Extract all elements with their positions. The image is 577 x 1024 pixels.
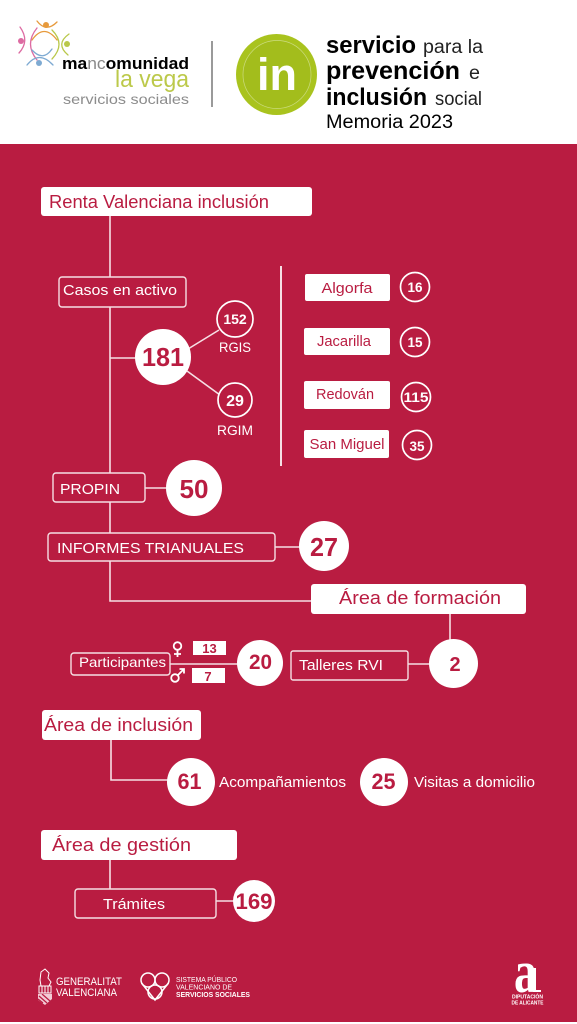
box: PROPIN: PROPIN — [60, 481, 120, 498]
value 61 Acompañamientos: Acompañamientos — [219, 775, 346, 791]
logo: in badge: in — [257, 49, 297, 100]
value 25 Visitas a domicilio: Visitas a domicilio — [414, 775, 535, 791]
value 20: 20 — [249, 651, 272, 674]
value 50: 50 — [180, 474, 208, 504]
box: Participantes — [71, 653, 170, 675]
value 61 Acompañamientos — [167, 758, 346, 806]
heading: Área de inclusión: Área de inclusión — [44, 715, 193, 735]
value 2: 2 — [449, 654, 461, 676]
heading: servicio para la prevención e inclusión social — [326, 32, 483, 133]
total 181 — [135, 329, 191, 385]
value 61 Acompañamientos: 61 — [178, 769, 202, 794]
box: Casos en activo: Casos en activo — [63, 282, 177, 299]
municipality: San Miguel: 35 — [409, 439, 425, 454]
municipality: Redován: Redován — [316, 386, 374, 403]
RGIS 152: 152 — [223, 311, 247, 327]
municipality: Jacarilla — [304, 328, 430, 356]
value 27: 27 — [310, 532, 338, 562]
value 25 Visitas a domicilio — [360, 758, 535, 806]
box: Talleres RVI: Talleres RVI — [299, 657, 383, 674]
box: Informes trianuales: INFORMES TRIANUALES — [57, 540, 244, 557]
connector lines — [110, 216, 450, 901]
box: Casos en activo — [59, 277, 186, 307]
municipalities divider — [280, 266, 282, 466]
RGIS 152 — [217, 301, 253, 355]
heading: Área de gestión — [41, 830, 237, 860]
icon: four figures — [18, 21, 70, 66]
municipality: Algorfa: 16 — [407, 280, 423, 295]
heading: servicio para la prevención e inclusión social: inclusión — [326, 84, 427, 111]
heading: servicio para la prevención e inclusión social: prevención — [326, 57, 460, 85]
value 50 — [166, 460, 222, 516]
municipality: Algorfa — [305, 272, 430, 302]
heading: servicio para la prevención e inclusión social: servicio — [326, 32, 416, 59]
logo: Diputación de Alicante: DIPUTACIÓN — [512, 992, 543, 1000]
box: Trámites — [75, 889, 216, 918]
logo: mancomunidad la vega — [18, 21, 190, 107]
box: PROPIN — [53, 473, 145, 502]
logo: Generalitat Valenciana: VALENCIANA — [56, 987, 118, 999]
municipality: Algorfa: Algorfa — [322, 280, 373, 297]
box: Informes trianuales — [48, 533, 275, 561]
logo: Sistema Público Valenciano de Servicios Sociales: SISTEMA PÚBLICO — [176, 975, 237, 984]
heading: servicio para la prevención e inclusión social: e — [469, 63, 480, 84]
icon: male symbol with 7 — [171, 668, 225, 684]
value 25 Visitas a domicilio: 25 — [372, 769, 396, 794]
RGIM 29: RGIM — [217, 422, 253, 438]
logo: mancomunidad la vega: la vega — [115, 66, 190, 93]
value 169 — [233, 880, 275, 922]
logo: Diputación de Alicante: a — [514, 939, 537, 1005]
box: Trámites: Trámites — [103, 896, 165, 913]
logo: Sistema Público Valenciano de Servicios Sociales: SERVICIOS SOCIALES — [176, 990, 250, 999]
icon: female symbol with 13: 13 — [202, 641, 217, 656]
logo: Sistema Público Valenciano de Servicios Sociales — [141, 973, 250, 1000]
heading: Área de formación — [311, 584, 526, 614]
municipality: Redován: 115 — [404, 390, 429, 405]
total 181: 181 — [142, 342, 184, 372]
municipality: Jacarilla: 15 — [407, 335, 423, 350]
value 27 — [299, 521, 349, 571]
icon: male symbol with 7: 7 — [204, 669, 212, 684]
logo: mancomunidad la vega: servicios sociales — [63, 91, 189, 107]
value 2 — [429, 639, 478, 688]
logo: Sistema Público Valenciano de Servicios Sociales: VALENCIANO DE — [176, 982, 232, 992]
RGIS 152: RGIS — [219, 339, 251, 355]
logo: Generalitat Valenciana — [38, 969, 122, 1005]
divider between logos — [211, 41, 213, 107]
icon: female symbol with 13 — [174, 641, 226, 657]
municipality: San Miguel: San Miguel — [310, 436, 384, 453]
value 20 — [237, 640, 283, 686]
wordmark: mancomunidad — [62, 54, 189, 73]
municipality: Redován — [304, 381, 430, 412]
heading: Área de formación: Área de formación — [339, 588, 501, 608]
heading: servicio para la prevención e inclusión social: social — [435, 89, 482, 110]
municipality: San Miguel — [304, 430, 432, 460]
RGIM 29 — [217, 383, 253, 438]
municipality: Jacarilla: Jacarilla — [317, 333, 372, 350]
logo: Diputación de Alicante: DE ALICANTE — [512, 1000, 544, 1006]
box: Talleres RVI — [291, 651, 408, 680]
heading: Renta Valenciana inclusión: Renta Valenciana inclusión — [49, 192, 269, 212]
box: Participantes: Participantes — [79, 654, 166, 670]
logo: Generalitat Valenciana: GENERALITAT — [56, 976, 122, 988]
logo: in badge — [236, 34, 317, 115]
heading: servicio para la prevención e inclusión social: Memoria 2023 — [326, 112, 453, 133]
heading: Área de gestión: Área de gestión — [52, 835, 191, 855]
RGIM 29: 29 — [226, 393, 244, 410]
heading: servicio para la prevención e inclusión social: para la — [423, 37, 483, 58]
value 169: 169 — [236, 889, 272, 914]
heading: Renta Valenciana inclusión — [41, 187, 312, 216]
heading: Área de inclusión — [42, 710, 201, 740]
